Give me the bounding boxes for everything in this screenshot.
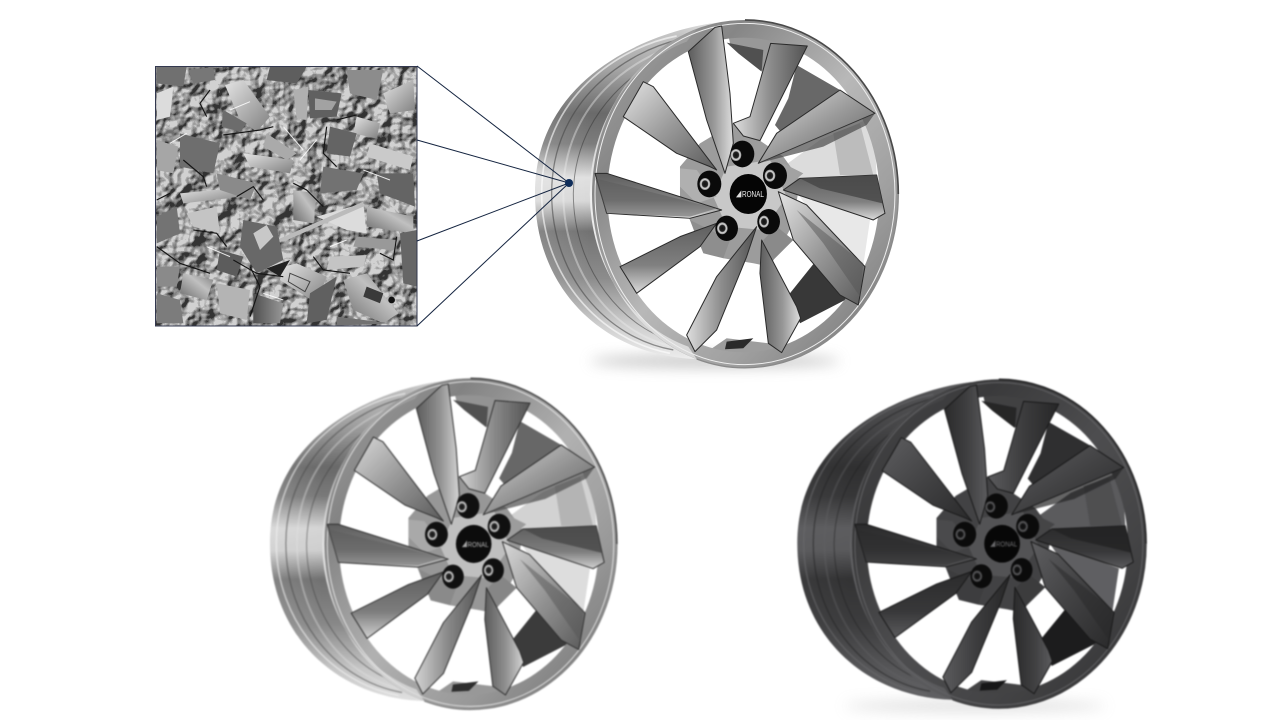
hub cap with logo — [984, 525, 1020, 563]
wheel: polished silver (top) — [535, 20, 898, 368]
scrap metal inset panel — [155, 66, 417, 326]
shadow under dark wheel — [845, 701, 1105, 711]
wheel: silver (bottom left) — [270, 378, 617, 710]
wheel: anthracite (bottom right) — [797, 379, 1146, 708]
zoom callout lines from wheel to inset — [417, 66, 569, 326]
hub cap with logo — [456, 525, 492, 563]
shadow under top wheel — [590, 355, 840, 367]
connector dot on top wheel — [565, 179, 573, 187]
hub cap with logo: RONAL — [742, 190, 764, 199]
hub cap with logo: RONAL — [996, 540, 1017, 549]
infographic canvas — [155, 19, 1148, 716]
hub cap with logo: RONAL — [468, 540, 489, 549]
hub cap with logo — [730, 174, 767, 214]
